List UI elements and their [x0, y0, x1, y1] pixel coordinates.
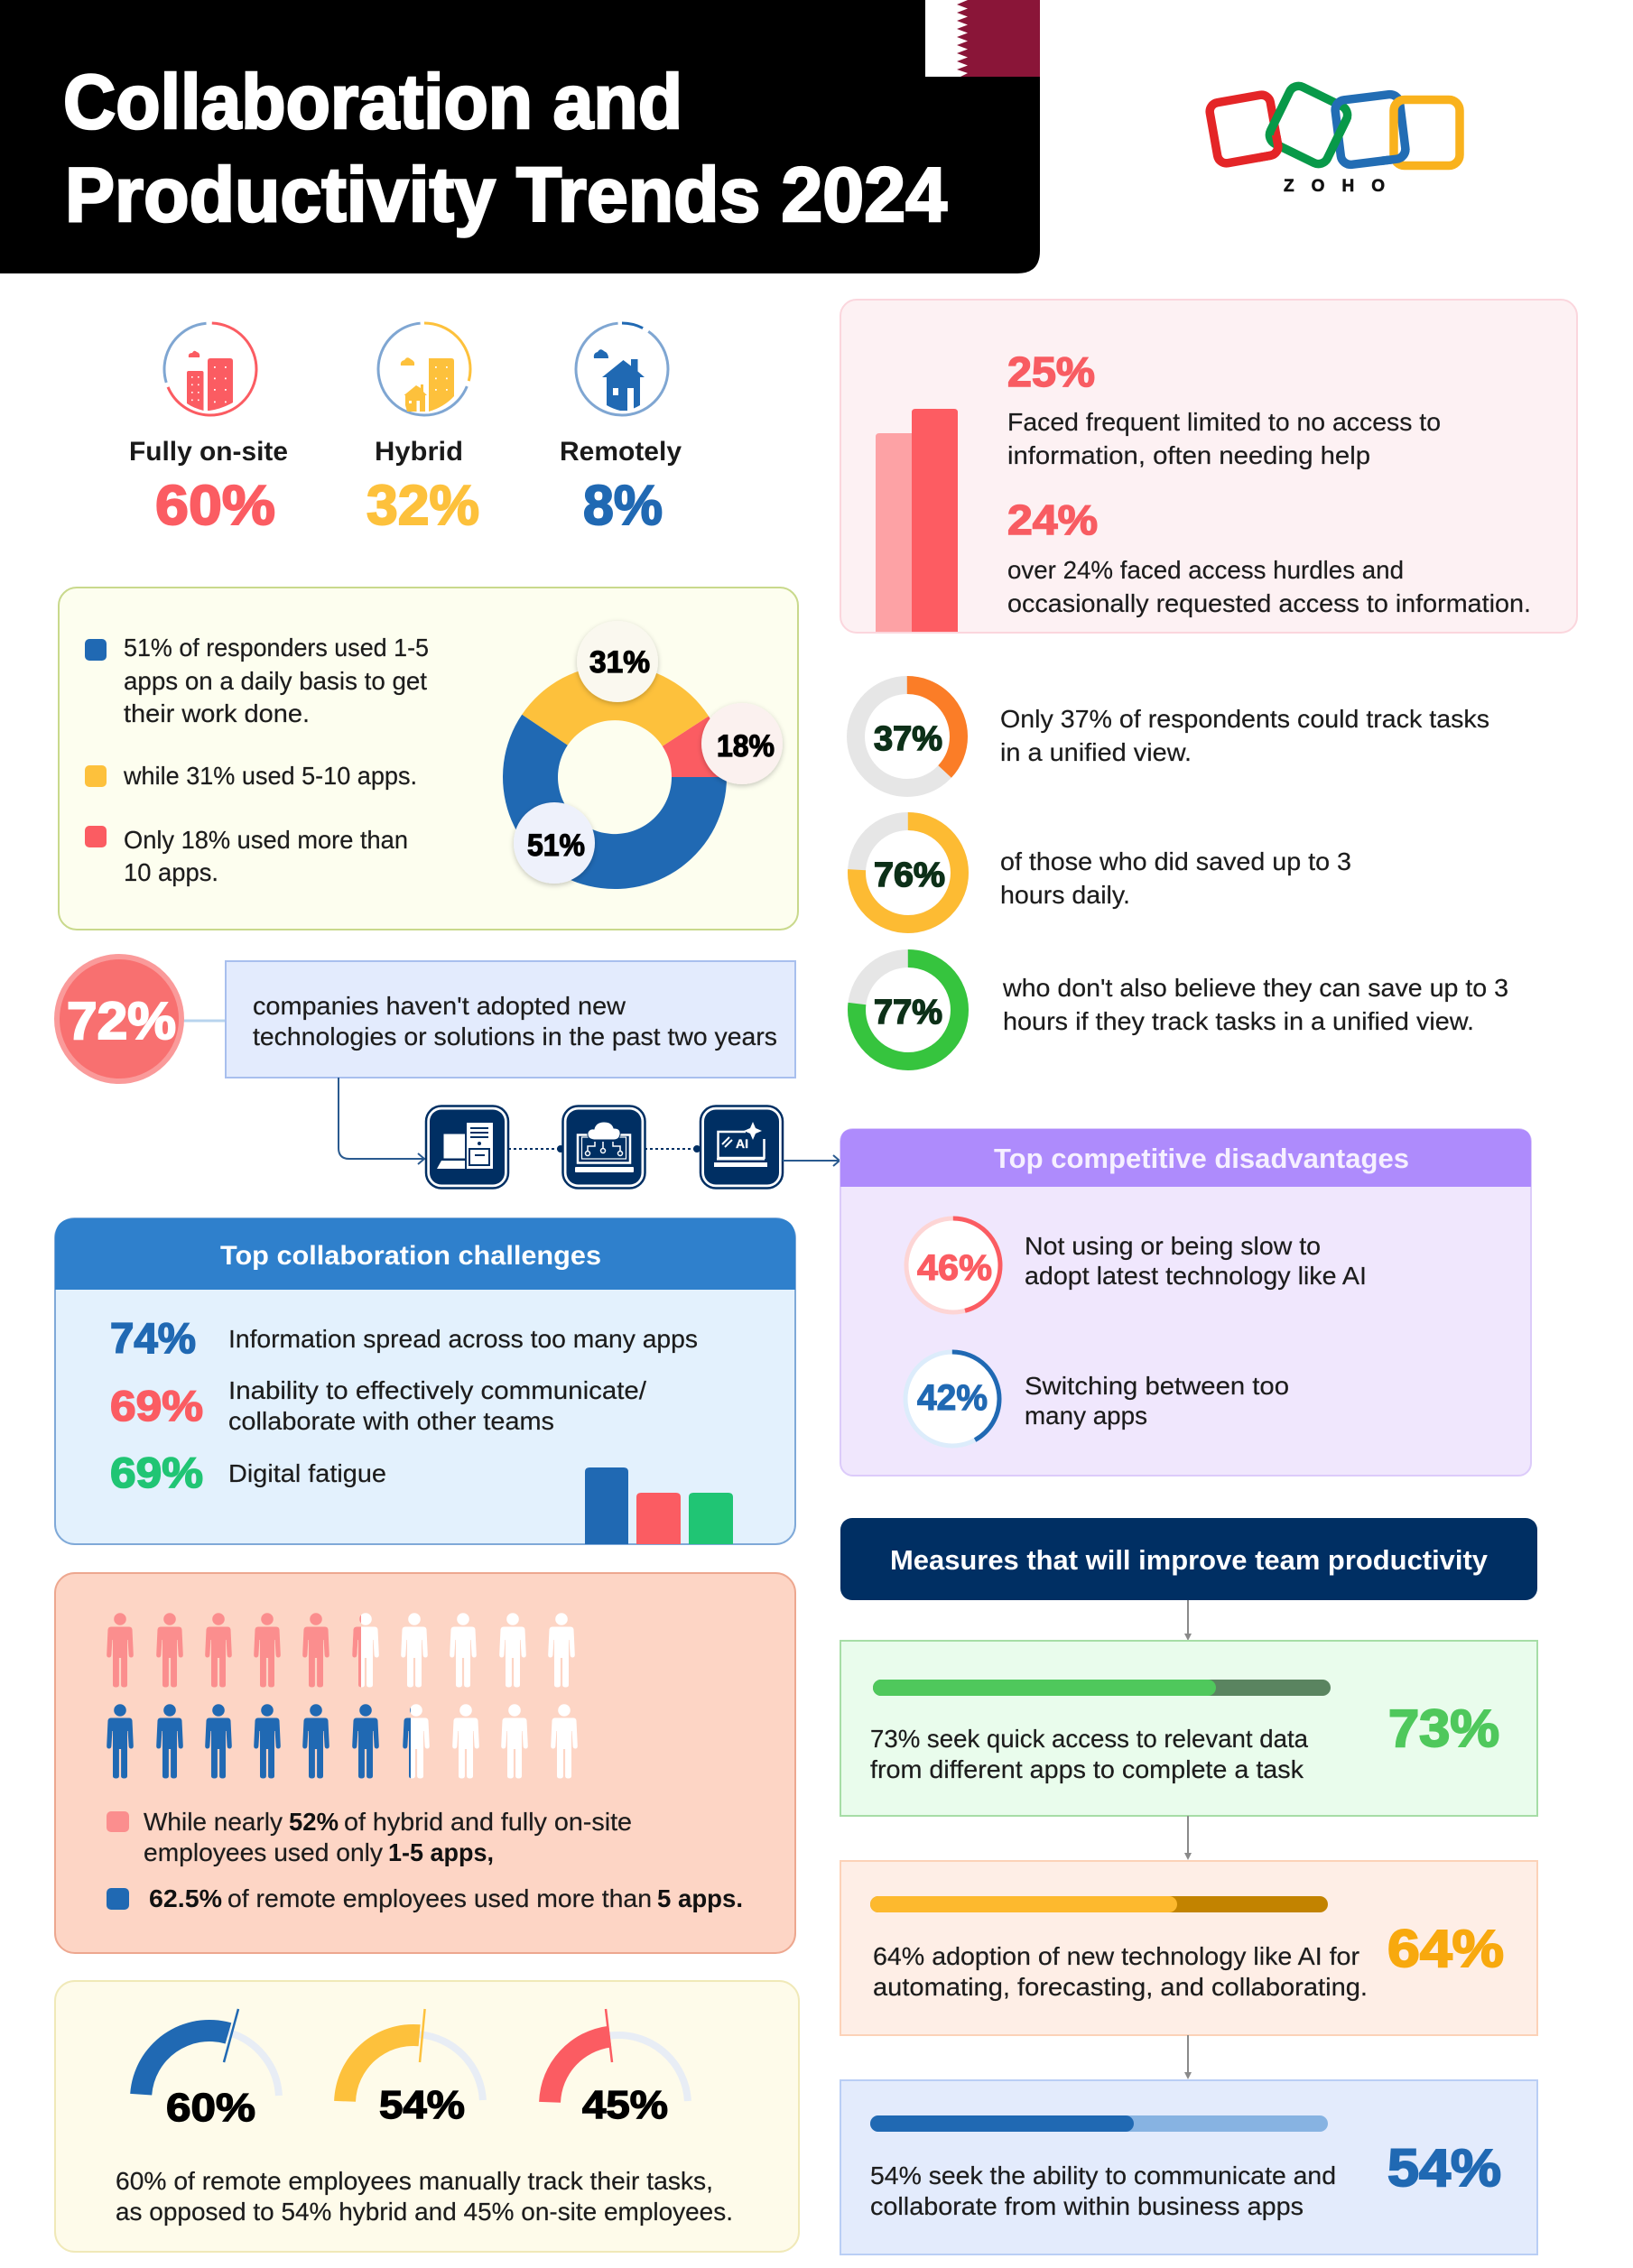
panel: access to information [840, 300, 1577, 633]
legend: 62.5% text: 62.5% [149, 1884, 222, 1912]
heading [840, 1129, 1531, 1187]
label: fully on-site 60% [129, 437, 288, 537]
stat: 69% fatigue [110, 1449, 386, 1496]
text: tracking summary: as opposed to 54% hybrid and 45% on-site employees. [116, 2198, 733, 2226]
label: remotely 8%: Remotely [560, 437, 682, 467]
text: 46%: adopt latest technology like AI [1025, 1262, 1367, 1290]
legend: 52% text [107, 1808, 632, 1866]
arrow: box to technology icons [339, 1078, 424, 1164]
stat: 73%: 73% [1388, 1699, 1499, 1758]
panel: work mode split [129, 305, 686, 537]
badge: 18%: 18% [717, 729, 775, 764]
heading [55, 1218, 795, 1290]
ring: 42%: 42% [917, 1378, 988, 1418]
text: 37%: Only 37% of respondents could track tasks [1000, 705, 1489, 733]
gauge: 45%: 45% [582, 2083, 668, 2127]
panel: apps used daily [59, 588, 798, 930]
legend: 52% text: 1-5 apps, [388, 1838, 494, 1866]
text: 76%: hours daily. [1000, 881, 1130, 909]
title text [63, 60, 947, 238]
title banner [0, 0, 1040, 273]
stat: 69% teams: collaborate with other teams [228, 1407, 554, 1435]
gauge: 54%: 54% [379, 2083, 465, 2127]
text: 77%: who don't also believe they can save up to 3 [1002, 974, 1508, 1002]
logo: Zoho [1209, 83, 1460, 196]
icon: fully on-site buildings [153, 311, 268, 427]
text: 54%: collaborate from within business apps [870, 2192, 1304, 2220]
text: tracking summary: 60% of remote employees manually track their tasks, [116, 2167, 713, 2195]
stat: 54%: 54% [1387, 2139, 1501, 2198]
label: remotely 8% [560, 437, 682, 537]
ring: 77% [857, 958, 960, 1061]
label: hybrid 32% [366, 437, 479, 537]
text: 46%: Not using or being slow to [1025, 1232, 1321, 1260]
gauge: 45% [539, 2009, 688, 2127]
logo: Zoho: ZOHO [1284, 177, 1385, 196]
text: 64% [873, 1942, 1368, 2001]
icon: AI laptop: AI [736, 1136, 748, 1151]
panel: measure 54% [840, 2080, 1537, 2254]
gauge: 54% [334, 2009, 483, 2127]
stat: 64%: 64% [1387, 1920, 1504, 1978]
text: 73%: 73% seek quick access to relevant data [870, 1725, 1308, 1753]
badge: 31% [577, 621, 658, 702]
text: 37% [1000, 705, 1489, 766]
progress bar: 73% [873, 1680, 1331, 1696]
label: hybrid 32%: 32% [366, 475, 479, 537]
text box: technologies or solutions in the past two years [253, 1023, 777, 1051]
bar chart: challenges [585, 1467, 733, 1544]
stat: 24% [1007, 496, 1531, 617]
stat circle: 72% [57, 957, 181, 1081]
heading: measures to improve productivity: Measures that will improve team productivity [890, 1544, 1489, 1576]
legend: 52% text: of hybrid and fully on-site [344, 1808, 632, 1836]
panel: measure 64% [840, 1861, 1537, 2035]
stat: 69% teams: Inability to effectively communicate/ [228, 1376, 646, 1404]
text: 64%: 64% adoption of new technology like AI for [873, 1942, 1359, 1970]
bar chart: access bars [876, 409, 958, 632]
legend: 52% text: While nearly [144, 1808, 283, 1836]
progress bar: 64% [870, 1896, 1328, 1912]
panel: top collaboration challenges [55, 1218, 795, 1544]
title text: Collaboration and [63, 60, 682, 145]
stat: 74%: Information spread across too many apps [228, 1325, 698, 1353]
label: fully on-site 60%: 60% [155, 475, 275, 537]
text: 77% [1002, 974, 1508, 1035]
legend: 18%: 10 apps. [124, 858, 218, 886]
legend: 18% [85, 826, 408, 886]
connector: dotted links [508, 1145, 701, 1153]
text: 46% [1025, 1232, 1367, 1290]
legend: 52% text: 52% [289, 1808, 339, 1836]
arrow: to second measure [1184, 1816, 1192, 1860]
legend: 62.5% text: 5 apps. [657, 1884, 743, 1912]
ring: 42% [905, 1352, 999, 1446]
legend: 31%: while 31% used 5-10 apps. [123, 762, 417, 790]
heading: Top competitive disadvantages [994, 1143, 1409, 1174]
stat: 74% [110, 1314, 698, 1362]
stat: 25%: Faced frequent limited to no access to [1007, 408, 1441, 436]
arrow: to first measure [1184, 1600, 1192, 1641]
text: 54%: 54% seek the ability to communicate and [870, 2162, 1336, 2189]
stat: 69% fatigue: 69% [110, 1449, 203, 1496]
stat: 24%: occasionally requested access to information. [1007, 589, 1531, 617]
text: 64%: automating, forecasting, and collaborating. [873, 1973, 1368, 2001]
legend: 51%: their work done. [124, 699, 310, 727]
arrow: to third measure [1184, 2035, 1192, 2079]
text: 77%: hours if they track tasks in a unified view. [1003, 1007, 1474, 1035]
badge: 31%: 31% [589, 645, 650, 680]
legend: 52% text: employees used only [144, 1838, 383, 1866]
panel: apps by work mode [55, 1573, 795, 1953]
text: 73% [870, 1725, 1308, 1783]
icon: desktop computer [426, 1106, 508, 1188]
text: 37%: in a unified view. [1000, 738, 1192, 766]
ring: 37%: 37% [874, 720, 942, 758]
pictogram: 52% hybrid and on-site [107, 1613, 575, 1688]
stat: 25%: 25% [1007, 348, 1095, 395]
ring: 76%: 76% [874, 856, 945, 894]
stat: 25%: information, often needing help [1007, 441, 1370, 469]
text: 42%: Switching between too [1025, 1372, 1289, 1400]
text: 42%: many apps [1025, 1402, 1147, 1430]
text: 54% [870, 2162, 1336, 2220]
ring: 37% [856, 685, 959, 788]
legend: 62.5% text: of remote employees used more than [227, 1884, 652, 1912]
text: 76% [1000, 847, 1351, 909]
heading: Top collaboration challenges [220, 1241, 601, 1271]
label: remotely 8%: 8% [583, 475, 663, 537]
panel: measure 73% [840, 1641, 1537, 1816]
badge: 51%: 51% [527, 829, 585, 863]
pictogram: 62.5% remote [107, 1704, 578, 1778]
badge: 51% [514, 802, 595, 884]
panel: top competitive disadvantages [840, 1129, 1531, 1476]
text: 76%: of those who did saved up to 3 [1000, 847, 1351, 875]
donut chart [503, 621, 783, 889]
icon: Qatar flag [925, 0, 1040, 77]
stat: 24%: over 24% faced access hurdles and [1007, 556, 1404, 584]
stat: 24%: 24% [1007, 496, 1098, 543]
stat: 69% fatigue: Digital fatigue [228, 1459, 386, 1487]
title text: Productivity Trends 2024 [65, 153, 947, 238]
ring: 46% [906, 1218, 1000, 1312]
label: fully on-site 60%: Fully on-site [129, 437, 288, 467]
text: 42% [1025, 1372, 1289, 1430]
arrow: icons to disadvantages [783, 1155, 840, 1166]
label: hybrid 32%: Hybrid [375, 437, 463, 467]
stat circle: 72%: 72% [67, 992, 176, 1051]
icon: hybrid building and house [365, 310, 484, 429]
legend: 18%: Only 18% used more than [124, 826, 408, 854]
stat: 74%: 74% [110, 1314, 196, 1362]
text box: companies haven't adopted new [253, 992, 626, 1020]
stat: 69% teams [110, 1376, 646, 1435]
gauge: 60% [130, 2009, 279, 2130]
heading: measures to improve productivity [840, 1518, 1537, 1600]
text box [226, 961, 795, 1078]
legend: 51%: 51% of responders used 1-5 [124, 634, 429, 662]
ring: 77%: 77% [874, 994, 942, 1032]
ring: 46%: 46% [917, 1248, 992, 1288]
legend: 51% [85, 634, 429, 727]
text: tracking summary [116, 2167, 733, 2226]
panel: unified view rings [856, 685, 1508, 1061]
icon: cloud laptop [563, 1106, 645, 1188]
icon: AI laptop [701, 1106, 783, 1188]
legend: 62.5% text [107, 1884, 743, 1912]
callout: 72% no new technology [57, 957, 795, 1081]
panel: manual task tracking [55, 1981, 799, 2252]
stat: 25% [1007, 348, 1441, 469]
text: 73%: from different apps to complete a task [870, 1755, 1304, 1783]
badge: 18% [701, 703, 783, 784]
progress bar: 54% [870, 2115, 1328, 2132]
legend: 51%: apps on a daily basis to get [124, 667, 427, 695]
icon: remote house [558, 305, 686, 433]
stat: 69% teams: 69% [110, 1382, 203, 1430]
ring: 76% [857, 821, 960, 924]
gauge: 60%: 60% [166, 2086, 255, 2130]
